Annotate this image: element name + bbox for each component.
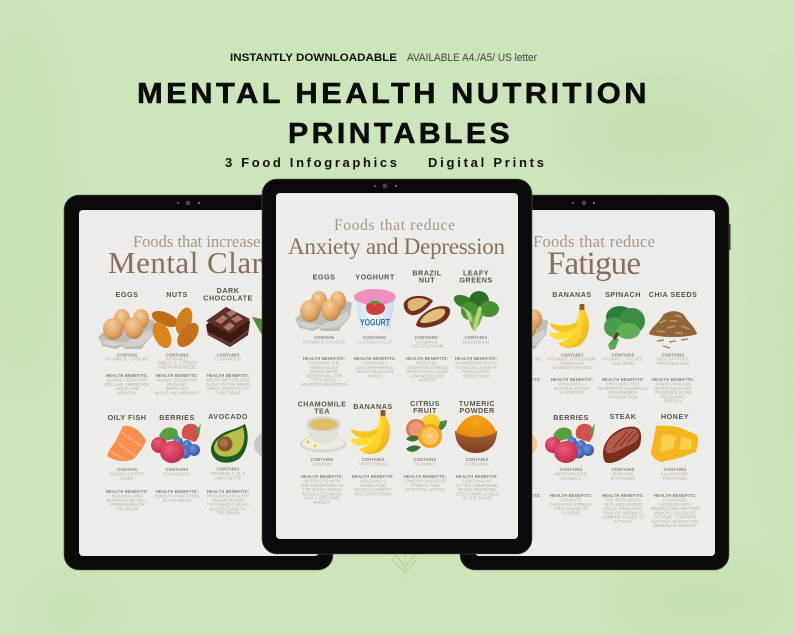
food: steak: HEALTH BENEFITS: xyxy=(602,493,644,498)
food: avocado: BLOOD FLOW TO xyxy=(210,506,247,511)
food: chia seeds: PROVIDES SLOW xyxy=(655,390,691,395)
food: spinach: CONTAINS xyxy=(612,352,634,358)
food: brazil nut: CONTAINS: xyxy=(415,335,439,340)
food: oily fish: ACIDS xyxy=(120,476,134,481)
food: bananas: BANANAS xyxy=(552,290,592,299)
food: dark chocolate: DARK xyxy=(217,286,240,295)
icon: berries xyxy=(545,424,595,463)
food: berries xyxy=(545,413,595,515)
food: bananas xyxy=(547,290,597,395)
food: bananas: HEALTH BENEFITS: xyxy=(551,377,593,382)
food: bananas: HEALTH BENEFITS: xyxy=(352,474,394,479)
food: eggs: WHICH MAKE xyxy=(310,369,338,374)
title: PRINTABLES xyxy=(288,118,513,150)
food: oily fish: HEALTH BENEFITS: xyxy=(106,489,148,494)
food: steak: THE IRON HELPS xyxy=(605,498,641,502)
food: honey: HONEY xyxy=(661,412,689,421)
food: berries: A BIG CAUSE OF xyxy=(554,506,589,511)
food: bananas: CARBOHYDRATES xyxy=(553,365,591,370)
food: citrus fruit: HEALTH BENEFITS: xyxy=(404,474,446,479)
food: nuts: IMPROVES xyxy=(166,386,189,391)
food: brazil nut xyxy=(404,268,450,383)
food: leafy greens: GREENS xyxy=(459,276,493,284)
heading: availability line: INSTANTLY DOWNLOADABLE xyxy=(230,52,397,64)
food: eggs: VITAMIN B, CHOLINE xyxy=(302,340,346,344)
food: eggs: FEEL GOOD xyxy=(311,378,337,383)
food: brazil nut: REDUCES xyxy=(416,360,438,366)
food: steak: CELLS, REDUCING xyxy=(603,506,643,511)
food: chamomile tea: EFFECT xyxy=(314,500,331,505)
food: oily fish: BUILDING AND xyxy=(112,494,142,498)
food: tumeric powder xyxy=(455,399,499,501)
food: bananas: BANANAS xyxy=(353,402,393,411)
food: brazil nut: HEALTH BENEFITS: xyxy=(406,356,448,361)
food: eggs: MEMORY xyxy=(117,390,137,395)
icon: citrus fruit xyxy=(406,414,447,452)
icon: faint leaf below centre tablet xyxy=(392,550,417,580)
title xyxy=(137,78,650,150)
icon: nuts xyxy=(149,305,203,351)
food: berries: HEALTH BENEFITS: xyxy=(550,493,592,498)
food: tumeric powder: ACTIVE COMPOUND xyxy=(456,483,498,488)
food: yoghurt xyxy=(354,272,396,378)
food: steak: RISK OF ANEMIA A xyxy=(604,510,643,515)
food: nuts: MOOD AND MEMORY xyxy=(155,390,199,395)
subtitle: Digital Prints xyxy=(428,155,544,170)
food: chia seeds: RELEASING xyxy=(661,394,685,399)
food: chia seeds: PROTEINS AND xyxy=(657,361,689,366)
food: brazil nut: WHICH CAN CAUSE xyxy=(406,369,448,374)
food: eggs xyxy=(98,290,155,395)
food: nuts: DECLINE, xyxy=(167,382,187,387)
food: eggs (partly hidden): HEALTH BENEFITS: xyxy=(499,377,541,382)
food: leafy greens: REGULATING xyxy=(462,369,490,374)
food: leafy greens (mostly hidden): LEAFY xyxy=(265,286,291,295)
food: bananas: AMINO ACID xyxy=(360,483,386,488)
food: berries: VITAMIN C xyxy=(560,476,582,481)
food: chia seeds: CHIA SEEDS xyxy=(649,290,697,299)
heading: Foods that reduce Anxiety and Depression xyxy=(288,217,506,259)
food: yoghurt: LACTOBACILLUS xyxy=(357,340,393,344)
food: yoghurt: BACTERIA WHICH xyxy=(356,365,394,370)
food: tumeric powder: SEROTONIN LEVELS xyxy=(455,491,499,496)
food: avocado: AVOCADO xyxy=(208,412,248,421)
food: citrus fruit: FRUIT xyxy=(413,406,437,415)
food: brazil nut: VITAMIN E, xyxy=(416,340,438,344)
food: leafy greens: A CRUCIAL ROLE IN xyxy=(455,365,497,370)
food: honey: IMMEDIATE ENERGY xyxy=(653,523,697,528)
icon: tumeric bowl xyxy=(455,415,497,453)
food: brazil nut: BRAZIL xyxy=(412,268,442,278)
food: grey fragment (mostly hidden) xyxy=(254,429,302,461)
food: yoghurt: CONTAINS A xyxy=(362,360,388,366)
food: chamomile tea: INTERACTS WITH xyxy=(304,478,340,484)
food: tumeric powder: WHICH INCREASE xyxy=(458,487,496,492)
food: avocado: FATS WHICH HELPS xyxy=(207,502,249,507)
food: avocado: HEALTH BENEFITS: xyxy=(207,489,249,494)
food: steak: COMMON CAUSE OF xyxy=(601,515,645,520)
food: eggs: HEALTH BENEFITS: xyxy=(106,373,148,378)
food: berries: BERRIES xyxy=(159,413,195,422)
food: honey: REDUCE INFLAMATION xyxy=(651,506,699,511)
heading: availability line xyxy=(230,52,537,64)
heading: Foods that reduce Anxiety and Depression: Anxiety and Depression xyxy=(288,234,506,259)
food: eggs xyxy=(295,272,352,387)
food: dark chocolate: CONTAINS xyxy=(217,352,239,358)
food: avocado: UNSATURATED xyxy=(212,498,244,503)
food: spinach xyxy=(598,290,649,399)
food: eggs (partly hidden) xyxy=(491,309,548,382)
subtitle xyxy=(225,155,544,170)
food: citrus fruit: CONTAINS xyxy=(414,457,436,462)
food: steak xyxy=(601,412,645,524)
food: citrus fruit: CORTISOL LEVELS xyxy=(405,487,445,492)
panel: right tablet, Fatigue xyxy=(460,195,730,570)
heading: Foods that reduce Fatigue xyxy=(533,232,655,282)
food: eggs: NEUROTRANSMITTER xyxy=(301,382,347,387)
food: chamomile tea: THE RECEPTORS IN xyxy=(301,483,343,488)
food: berries: FATIGUE xyxy=(562,510,580,515)
food: brazil nut: LOW MOOD AND xyxy=(410,373,444,378)
heading: availability line: AVAILABLE A4./A5/ US letter xyxy=(407,52,537,64)
icon: yoghurt pot: YOGURT xyxy=(360,318,390,328)
food: bananas: PROVIDES A xyxy=(559,382,585,386)
food: chamomile tea: CHAMOMILE xyxy=(298,400,346,408)
food: oily fish (partly hidden) xyxy=(499,430,541,498)
food: tumeric powder: HEALTH BENEFITS: xyxy=(456,474,498,479)
food: citrus fruit: VITAMIN C xyxy=(414,461,436,466)
food: honey: FRUCTOSE xyxy=(663,476,687,481)
icon: honey xyxy=(651,426,698,462)
food: avocado: THE BRAIN xyxy=(216,511,240,516)
food: spinach: PRODUCTION xyxy=(608,394,638,399)
food: bananas xyxy=(350,402,394,496)
food: bananas: CONTAINS A xyxy=(360,478,386,484)
heading: Foods that reduce Anxiety and Depression: Foods that reduce xyxy=(334,217,455,234)
food: chamomile tea: TEA xyxy=(314,406,330,416)
food: nuts: SLOWS COGNITIVE xyxy=(157,378,198,382)
food: berries: BOOSTS FUNCTIONS xyxy=(155,494,199,498)
food: tumeric powder: CONTAINS xyxy=(466,457,488,462)
food: eggs: MOOD AND xyxy=(115,386,139,391)
food: eggs: CONTAIN xyxy=(117,352,137,358)
food: nuts xyxy=(149,290,203,395)
food: yoghurt: MOOD xyxy=(368,373,382,378)
food: brazil nut: ANXIETY xyxy=(418,378,436,383)
food: tumeric powder: CURCUMIN xyxy=(465,461,489,466)
food: avocado xyxy=(206,412,250,516)
food: oily fish xyxy=(106,413,148,511)
food: citrus fruit: CITRUS xyxy=(410,399,440,408)
food: chamomile tea: HAS A SEDATIVE xyxy=(304,496,340,501)
icon: bananas xyxy=(549,304,589,348)
food: leafy greens: CONTAINS xyxy=(465,335,487,340)
food: honey: NATURAL SUGAR FOR xyxy=(652,519,698,524)
food: nuts: OMEGA-3, COPPER xyxy=(157,360,197,366)
panel: centre tablet, Anxiety and Depression xyxy=(262,179,532,554)
food: bananas: NATURAL BOOST xyxy=(554,386,590,391)
food: steak: STEAK xyxy=(610,412,637,421)
subtitle: 3 Food Infographics xyxy=(225,155,397,170)
food: citrus fruit xyxy=(404,399,447,492)
food: chamomile tea: THE BRAIN WHICH xyxy=(302,487,342,492)
food: oily fish: OMEGA-3 FATTY xyxy=(110,472,144,476)
icon: spinach xyxy=(604,306,645,350)
food: berries: COMBATS xyxy=(560,498,582,502)
food: tumeric powder: TUMERIC xyxy=(459,399,495,408)
food: tumeric powder: CONTAINS AN xyxy=(462,478,492,484)
food: honey: FATIGUE. CONTAINS xyxy=(654,515,697,520)
food: chamomile tea: APIGENIN xyxy=(312,461,332,466)
heading: Foods that increase Mental Clarity: Foods that increase xyxy=(133,232,260,251)
food: bananas: CONTAINS xyxy=(362,457,384,462)
food: bananas: INTO SEROTONIN xyxy=(354,491,392,496)
food: avocado: AND FOLATE xyxy=(215,475,242,480)
food: leafy greens (mostly hidden): GREENS xyxy=(261,294,295,302)
heading: Foods that increase Mental Clarity: Mental Clarity xyxy=(108,245,297,280)
title: MENTAL HEALTH NUTRITION xyxy=(137,78,650,110)
food: chia seeds: FIGHTS INSULIN xyxy=(656,382,690,386)
food: dark chocolate: WHICH BOOSTS ITS xyxy=(207,386,249,391)
food: berries: CONTAINS xyxy=(166,467,188,472)
heading: Foods that reduce Fatigue: Foods that reduce xyxy=(533,232,655,251)
icon: steak xyxy=(603,427,641,463)
icon: oily fish xyxy=(107,426,146,461)
food: tumeric powder: POWDER xyxy=(459,406,495,415)
food: chia seeds: HEALTH BENEFITS: xyxy=(652,377,694,382)
food: chia seeds xyxy=(649,290,697,404)
icon: chamomile tea cup xyxy=(300,416,346,452)
food: bananas: TRYPTOPHAN xyxy=(358,461,388,466)
food: dark chocolate: FUNCTIONS xyxy=(215,390,241,395)
food: chia seeds: RESISTANCE AND xyxy=(654,386,692,391)
food: chamomile tea: HEALTH BENEFITS: xyxy=(301,474,343,479)
food: brazil nut: AND SELENIUM xyxy=(411,344,444,348)
food: eggs: AMINO ACIDS xyxy=(310,365,338,370)
food: yoghurt: YOGHURT xyxy=(355,272,395,282)
food: bananas: VITAMINS, POTASSIUM, xyxy=(547,356,597,362)
food: eggs: SLOWS COGNITIVE xyxy=(107,378,148,382)
icon: dark chocolate xyxy=(206,307,250,347)
food: dark chocolate: FLOW TO THE BRAIN xyxy=(206,382,250,387)
food: brazil nut: NUT xyxy=(419,276,435,284)
food: steak: WITH RED BLOOD xyxy=(604,502,642,507)
food: nuts: CONTAINS xyxy=(166,352,188,358)
food: honey: FLAVANOIDS, xyxy=(661,472,689,476)
food: leafy greens xyxy=(451,268,499,378)
food: chamomile tea xyxy=(298,400,346,505)
panel: left tablet, Mental Clarity xyxy=(64,195,333,570)
food: berries: OXIDATIVE STRESS, xyxy=(550,502,592,507)
food: leafy greens: MAGNESIUM xyxy=(463,340,490,344)
food: dark chocolate: HELPS WITH BLOOD xyxy=(206,378,250,382)
food: eggs: EGGS xyxy=(313,272,335,282)
icon: eggs xyxy=(491,309,548,349)
food: avocado: PROVIDES HEALTHY xyxy=(206,494,250,498)
food: eggs: CONTAIN xyxy=(314,335,334,340)
icon: leafy greens xyxy=(252,317,272,341)
food: chamomile tea: CONTAINS xyxy=(311,457,333,462)
food: eggs (partly hidden): VITAMIN B, CHOLINE xyxy=(498,356,542,362)
icon: leafy greens xyxy=(451,291,499,331)
icon: berries xyxy=(151,424,201,463)
food: berries xyxy=(151,413,201,503)
food: leafy greens: HEALTH BENEFITS: xyxy=(455,356,497,361)
food: citrus fruit: STRESS, AND xyxy=(411,483,439,488)
food: berries: CONTAINS xyxy=(560,467,582,472)
food: yoghurt: HELPS REGULATE xyxy=(356,369,394,374)
food: oily fish (partly hidden): HEALTH BENEFITS: xyxy=(499,493,541,498)
food: spinach: HEALTH BENEFITS: xyxy=(602,377,644,382)
icon: eggs xyxy=(98,309,155,349)
food: citrus fruit: LOWERS OXIDATIVE xyxy=(404,478,447,484)
food: leafy greens: SEROTONIN xyxy=(463,373,489,378)
food: spinach: FOR ENERGY xyxy=(609,390,637,395)
food: eggs: CONTAINS THE xyxy=(308,360,340,366)
food: bananas: WHICH CONVERT xyxy=(354,487,392,492)
icon: avocado xyxy=(211,424,248,463)
food: leafy greens: MAGNESIUM PLAYS xyxy=(455,360,497,366)
food: chamomile tea: REGULATES MOOD xyxy=(302,491,342,496)
food: steak: CONTAINS xyxy=(612,467,634,472)
food: nuts: AND MANGANESE xyxy=(158,364,196,370)
food: nuts: VITAMIN E, xyxy=(166,356,188,362)
food: steak: IRON AND xyxy=(612,472,634,476)
food: berries: IN THE BRAIN xyxy=(163,498,191,503)
food: avocado: VITAMINS C, E, K xyxy=(210,471,246,476)
food: berries: HEALTH BENEFITS: xyxy=(156,489,198,494)
icon: oily fish xyxy=(503,430,537,458)
food: dark chocolate xyxy=(203,286,253,395)
food: eggs: HEALTH BENEFITS: xyxy=(303,356,345,361)
food: yoghurt: CONTAINS: xyxy=(363,335,387,340)
food: honey: CONTAINS xyxy=(664,467,686,472)
food: berries: FLAVANOIDS xyxy=(164,472,191,476)
icon: brazil nuts xyxy=(404,296,450,328)
food: bananas: IN ENERGY xyxy=(560,390,584,395)
food: spinach: NUTRIENTS ESSENTIAL xyxy=(598,386,649,391)
food: chia seeds: CONTAINS xyxy=(662,352,684,358)
food: leafy greens (mostly hidden) xyxy=(252,286,295,341)
food: avocado: CONTAINS xyxy=(217,466,239,472)
heading: Foods that reduce Fatigue: Fatigue xyxy=(547,246,641,282)
food: dark chocolate: HEALTH BENEFITS: xyxy=(207,373,249,378)
food: leafy greens: LEAFY xyxy=(463,268,489,278)
food: spinach: AND IRON xyxy=(612,361,634,366)
food: nuts: HEALTH BENEFITS: xyxy=(156,373,198,378)
food: honey: HEALTH BENEFITS: xyxy=(654,493,696,498)
food: spinach: VITAMIN C, FOLATE, xyxy=(602,356,644,362)
food: yoghurt: HEALTH BENEFITS: xyxy=(354,356,396,361)
food: honey: FLAVANOID xyxy=(663,498,687,502)
food: oily fish: THE BRAIN xyxy=(115,506,139,511)
food: berries: BERRIES xyxy=(553,413,589,422)
food: steak: B VITAMINS xyxy=(611,476,635,481)
food: steak: FATIGUE xyxy=(614,519,632,524)
food: oily fish: CONTAIN xyxy=(117,467,137,472)
food: eggs: EGGS xyxy=(116,290,138,299)
food: tumeric powder: IN THE BRAIN xyxy=(463,496,491,501)
food: chia seeds: ENERGY xyxy=(664,399,682,404)
food: honey xyxy=(651,412,699,528)
food: honey: WHICH CAN CAUSE xyxy=(654,510,696,515)
icon: grey fragment xyxy=(254,429,302,461)
icon: chia seeds xyxy=(649,311,697,348)
food: oily fish: MEMBRANES IN xyxy=(110,502,144,507)
food: oily fish: MAINTAINING CELL xyxy=(107,498,148,503)
food: spinach: PROVIDES THE xyxy=(607,382,639,386)
food: oily fish: OILY FISH xyxy=(108,413,146,422)
food: spinach: SPINACH xyxy=(605,290,641,299)
food: brazil nut: OXIDATIVE STRESS xyxy=(406,365,448,370)
food: eggs: VITAMIN B, CHOLINE xyxy=(105,356,149,362)
icon: bananas xyxy=(350,410,390,454)
food: eggs: DECLINE, IMPROVES xyxy=(105,382,149,387)
food: nuts: NUTS xyxy=(166,290,188,299)
icon: eggs xyxy=(295,291,352,331)
food: honey: ANTIOXIDANTS xyxy=(659,502,691,507)
food: bananas: CONTAINS xyxy=(561,352,583,358)
food: eggs: SEROTONIN, THE xyxy=(306,373,343,378)
food: berries: ANTIOXIDANTS, xyxy=(554,472,588,476)
food: dark chocolate: CHOCOLATE xyxy=(203,294,253,302)
food: bananas: FIBER AND xyxy=(560,361,584,366)
food: dark chocolate: FLAVANOIDS xyxy=(215,356,242,362)
food: chia seeds: HEALTHY FATS, xyxy=(657,356,689,362)
